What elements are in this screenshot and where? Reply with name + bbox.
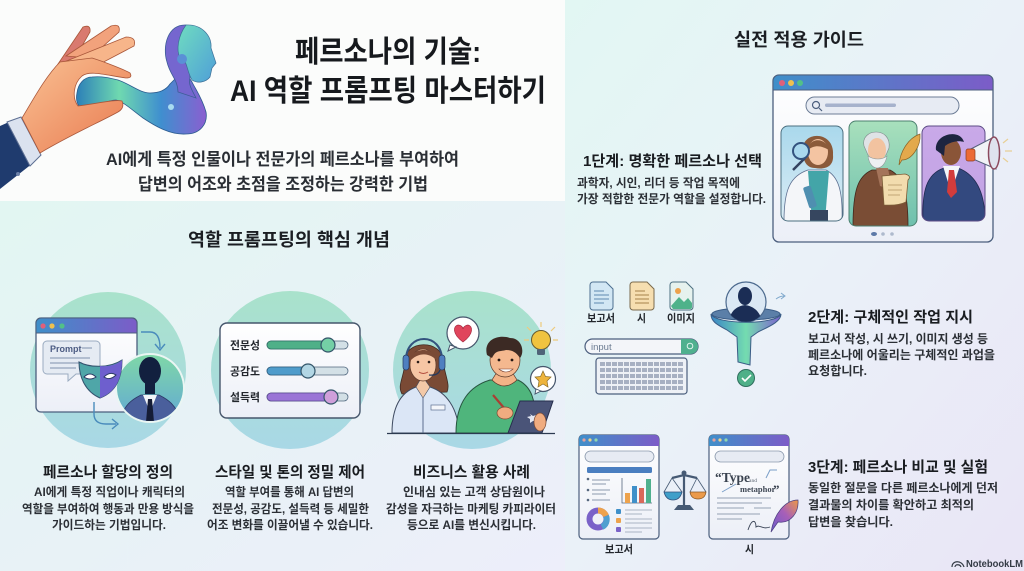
icon: quill pen — [771, 500, 798, 532]
heading: core concepts: 역할 프롬프팅의 핵심 개념 — [188, 230, 390, 250]
text: step 3 description: 답변을 찾습니다. — [808, 514, 893, 529]
panel: step 1 — [577, 75, 1012, 242]
text: business use cases description: 등으로 AI를 변신시킵니다. — [407, 517, 536, 532]
icon: keyboard — [596, 358, 687, 394]
heading: business use cases: 비즈니스 활용 사례 — [413, 464, 530, 481]
text: style and tone description — [207, 485, 373, 532]
heading: persona assignment: 페르소나 할당의 정의 — [43, 464, 173, 481]
icon: poem window — [709, 435, 789, 539]
label: image: 이미지 — [667, 312, 695, 325]
icon: poem document — [630, 282, 654, 310]
title — [230, 36, 546, 108]
text: step 2 description: 페르소나에 어울리는 구체적인 과업을 — [808, 347, 995, 362]
icon: persona selection browser window — [773, 75, 1012, 242]
panel: step 2 — [585, 282, 995, 394]
icon: image document — [670, 282, 693, 310]
background: right panel — [565, 0, 1024, 571]
icon: flowing ribbon body — [76, 70, 206, 134]
panel: business use cases — [386, 291, 558, 532]
text: style and tone description: 어조 변화를 이끌어낼 수 있습니다. — [207, 517, 373, 532]
icon: megaphone — [966, 137, 1012, 169]
icon: persona assignment illustration — [30, 292, 186, 448]
subtitle: AI에게 특정 인물이나 전문가의 페르소나를 부여하여 — [106, 150, 459, 169]
icon: input bar — [585, 339, 698, 354]
text: style and tone description: 전문성, 공감도, 설득력 등 세밀한 — [212, 501, 369, 516]
icon: input bar: input — [591, 342, 612, 353]
icon: persona head — [165, 25, 216, 110]
icon: report window — [579, 435, 659, 539]
label: poem: 시 — [745, 543, 754, 556]
text: business use cases description: 인내심 있는 고객 상담원이나 — [403, 485, 545, 499]
heading: step 1: 1단계: 명확한 페르소나 선택 — [583, 153, 762, 170]
icon: check mark — [738, 370, 754, 386]
text: step 3 description — [808, 480, 998, 529]
icon: poem window: metaphor — [740, 484, 776, 494]
subtitle — [106, 150, 459, 194]
text: business use cases description: 감성을 자극하는 마케팅 카피라이터 — [386, 501, 556, 516]
icon: tone sliders: 전문성 — [230, 339, 260, 352]
text: persona assignment description: AI에게 특정 직업이나 캐릭터의 — [34, 485, 185, 499]
text: persona assignment description: 역할을 부여하여 행동과 만용 방식을 — [22, 501, 194, 516]
text: step 1 description: 과학자, 시인, 리더 등 작업 목적에 — [577, 175, 740, 190]
icon: copywriter with tablet — [456, 337, 553, 433]
icon: persona assignment illustration: Prompt — [50, 344, 82, 354]
panel: step 3 — [579, 435, 998, 556]
label: poem: 시 — [637, 312, 646, 325]
icon: poet card — [849, 121, 920, 226]
icon: customer consultant — [392, 339, 459, 433]
subtitle: 답변의 어조와 초점을 조정하는 강력한 기법 — [138, 175, 428, 194]
icon: heart bubble — [447, 317, 479, 351]
panel: persona assignment — [22, 292, 194, 532]
text: step 2 description: 보고서 작성, 시 쓰기, 이미지 생성 등 — [808, 331, 988, 346]
icon: leader card — [922, 126, 985, 221]
text: step 3 description: 결과물의 차이를 확안하고 최적의 — [808, 497, 974, 512]
icon: poem window: “Type — [715, 470, 750, 485]
label: report: 보고서 — [605, 543, 633, 556]
icon: poem window: ” — [773, 482, 780, 497]
heading: practical guide: 실전 적용 가이드 — [734, 30, 864, 50]
heading: step 3: 3단계: 페르소나 비교 및 실험 — [808, 459, 988, 476]
text: step 2 description: 요청합니다. — [808, 363, 867, 378]
text: business use cases description — [386, 485, 556, 532]
heading: style and tone: 스타일 및 톤의 정밀 제어 — [215, 464, 365, 481]
text: step 2 description — [808, 331, 995, 378]
icon: consultant and copywriter illustration — [387, 291, 558, 449]
icon: scientist card — [781, 126, 843, 221]
text: style and tone description: 역할 부여를 통해 AI 답변의 — [225, 485, 354, 499]
icon: balance scale — [664, 470, 706, 510]
icon: hand — [22, 25, 135, 153]
icon: tone sliders — [211, 291, 369, 449]
icon: funnel with persona — [711, 282, 785, 365]
icon: tone sliders: 설득력 — [230, 391, 260, 404]
text: step 3 description: 동일한 절문을 다른 페르소나에게 던저 — [808, 480, 998, 495]
pagination dots — [871, 232, 894, 236]
icon: suit sleeve — [0, 117, 41, 189]
label: report: 보고서 — [587, 312, 615, 325]
background: header panel — [0, 0, 565, 201]
icon: star bubble — [530, 366, 556, 394]
title: 페르소나의 기술: — [295, 36, 481, 69]
icon: report document — [590, 282, 613, 310]
icon: light bulb — [524, 322, 558, 355]
heading: step 2: 2단계: 구체적인 작업 지시 — [808, 309, 973, 326]
text: step 1 description — [577, 175, 766, 206]
background: lower-left panel — [0, 200, 565, 571]
illustration: hand shaping a persona figure — [0, 25, 216, 189]
icon: poem window: and — [749, 478, 757, 484]
panel: style and tone control — [207, 291, 373, 532]
title: AI 역할 프롬프팅 마스터하기 — [230, 75, 546, 108]
text: persona assignment description — [22, 485, 194, 532]
text: step 1 description: 가장 적합한 전문가 역할을 설정합니다. — [577, 191, 766, 206]
text: persona assignment description: 가이드하는 기법입니다. — [52, 517, 166, 532]
icon: tone sliders: 공감도 — [230, 365, 260, 378]
